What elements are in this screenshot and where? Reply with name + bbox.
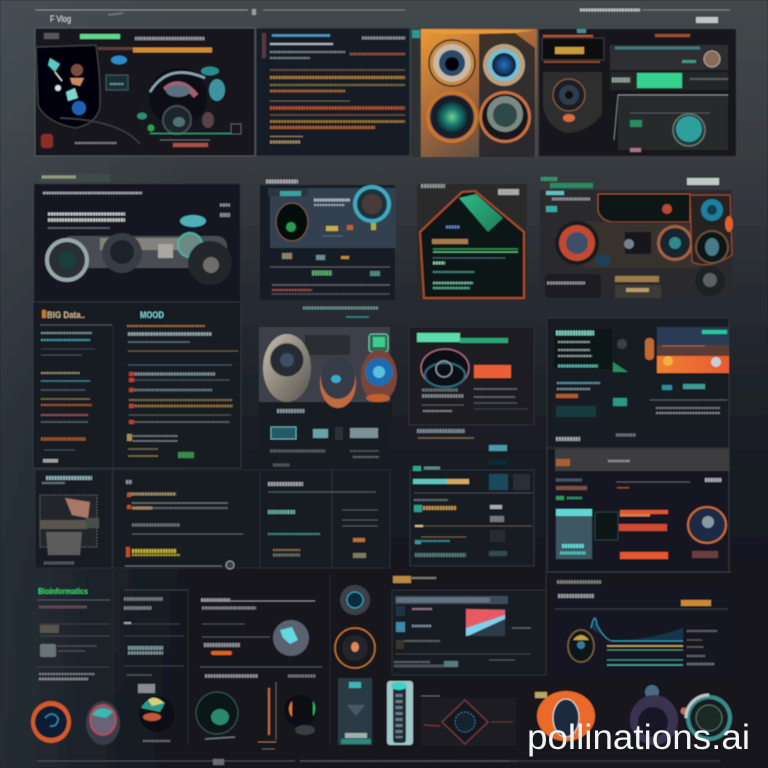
panel: spiral eye card: [409, 327, 534, 425]
icon: console lens: [543, 72, 602, 133]
icon: lens bottom right: [479, 91, 531, 143]
heading: MOOD: [140, 310, 164, 320]
panel: left list with dotted map: [35, 470, 112, 568]
panel: spectrum chart: [546, 572, 732, 677]
lower text: [270, 411, 379, 465]
icon: orange swirl: [31, 701, 71, 743]
panel: control console: [539, 29, 736, 156]
panel: triple lens camera: [259, 327, 397, 468]
side screen: [106, 56, 128, 90]
panel: red and blue thumbnail: [392, 576, 546, 675]
icon: spiral eye: [421, 349, 469, 387]
icon: purple lens: [630, 685, 688, 745]
icon: controller body: [45, 233, 232, 285]
right column: [127, 326, 238, 458]
panel: summary bars: [547, 448, 729, 572]
icon: big orange lens: [535, 691, 595, 741]
icon: dotted terrain: [40, 495, 99, 555]
icon: diamond eye: [421, 696, 516, 746]
footer controls: [41, 118, 241, 148]
panel: binocular controller: [34, 174, 240, 302]
top header rule and title: F Vlog: [50, 14, 71, 24]
curve and bars: [591, 618, 717, 665]
icon: shield dial: [688, 507, 726, 543]
left column: [41, 333, 95, 462]
header tags: [44, 33, 212, 52]
red dot: [662, 204, 672, 214]
icons: bottom lens row: [31, 681, 732, 749]
panel: lower middle index: [124, 590, 188, 745]
icon: chrome lens: [263, 334, 311, 402]
status box with green meter: [610, 45, 728, 90]
panel: green arrow house: [417, 184, 527, 298]
watermark: pollinations.ai: [527, 718, 750, 757]
icons: right column discs: [330, 575, 375, 745]
icon: lens top left: [429, 40, 475, 86]
panel: orange sunset analytics: [547, 318, 729, 448]
icon: needle chart: [258, 682, 276, 749]
panel: middle list: [113, 470, 260, 569]
icon: dial: [568, 630, 594, 662]
card: device: [338, 678, 372, 745]
panel: long report table: [33, 302, 241, 468]
panel: right list: [260, 470, 390, 568]
panel: slate gauge: [260, 182, 396, 317]
panel: red lens console: [540, 178, 733, 298]
teal card: [556, 509, 592, 559]
icon: orange and green pod: [284, 695, 316, 735]
panel: lower right index: [200, 600, 322, 676]
icon: orange cone lens: [320, 357, 356, 408]
top black display: [598, 194, 690, 222]
icon: dark globe: [138, 684, 175, 741]
thumbnail chart: [466, 609, 505, 636]
heading: BIG Data..: [47, 310, 85, 320]
icon: teal remote: [387, 681, 413, 745]
icon: cyan ring: [355, 187, 389, 221]
icon: small teal disc: [340, 585, 370, 615]
panel: lower left index: Bioinformatics: [38, 587, 88, 596]
icon: iridescent blob: [273, 620, 309, 656]
icon: orange ring lens: [335, 628, 375, 668]
icon: green tag: [369, 334, 388, 352]
left mini screen: [542, 38, 604, 62]
panel: orange four lens card: [411, 29, 537, 157]
icon: teal ring lens: [686, 695, 732, 741]
icon: blue eye lens: [361, 350, 397, 402]
icon: glass sphere: [196, 692, 238, 739]
footer rule: [37, 759, 720, 765]
icon: rainbow pod: [86, 701, 120, 745]
icon: headset lens: [137, 66, 225, 134]
top header rule and title: [35, 9, 730, 24]
icon: lens top right: [483, 44, 525, 86]
blue and orange thumbnail: [657, 327, 729, 373]
icon: black shield: [36, 45, 100, 128]
heading: [42, 310, 164, 320]
panel: lower left index: [37, 570, 113, 690]
icon: right stacked lenses: [690, 195, 733, 265]
icon: lens bottom left: [426, 91, 478, 143]
icon: black egg: [276, 203, 308, 241]
panel: text report with orange lines: [256, 28, 410, 156]
panel: teal table: [410, 431, 534, 566]
outline box with teal dial: [614, 95, 728, 152]
panel: headset dashboard: [35, 28, 255, 156]
icon: console body with lenses: [555, 221, 700, 268]
